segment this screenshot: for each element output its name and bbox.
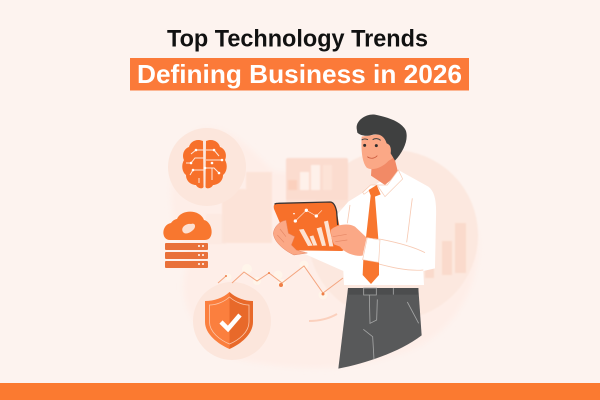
background bars left	[206, 172, 272, 244]
hair	[357, 114, 407, 161]
background chart panel	[286, 158, 348, 208]
background bars right	[425, 223, 466, 278]
title highlight banner: Defining Business in 2026	[137, 59, 462, 89]
footer bar	[0, 383, 600, 400]
title: Top Technology Trends	[167, 26, 428, 52]
tablet	[274, 202, 344, 251]
shirt fold lines	[347, 198, 425, 270]
line chart	[218, 260, 343, 321]
collar	[363, 170, 403, 197]
icon: shield circle	[193, 282, 271, 360]
man: trousers	[338, 288, 422, 369]
right cuff	[363, 238, 380, 262]
ear	[391, 145, 399, 155]
finger lines	[277, 229, 347, 242]
tie lower	[363, 260, 379, 284]
head	[361, 133, 399, 169]
icon: cloud and server	[163, 212, 212, 268]
man figure	[273, 114, 436, 285]
background circle behind man	[308, 150, 478, 320]
neck	[371, 153, 398, 185]
background blob	[171, 128, 478, 368]
tie	[366, 185, 381, 239]
shirt	[303, 170, 436, 285]
left hand	[273, 220, 307, 255]
right hand	[331, 224, 367, 256]
face details	[362, 139, 381, 158]
icon: brain circle	[168, 128, 246, 206]
